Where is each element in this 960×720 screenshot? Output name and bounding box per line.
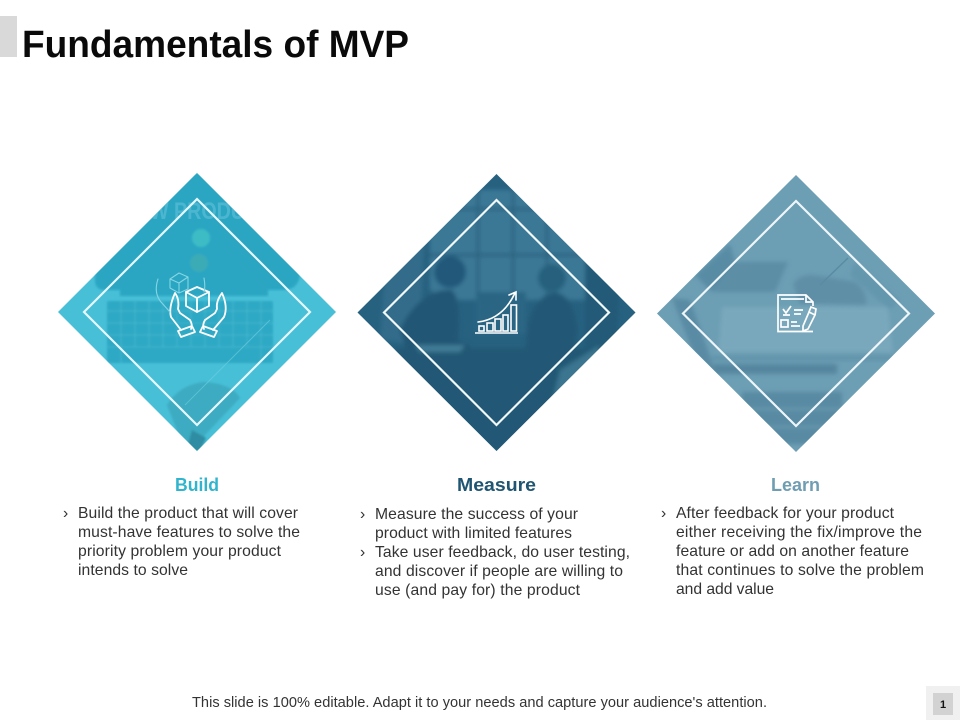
text block: measure: ›	[360, 544, 365, 561]
title accent block	[0, 16, 17, 57]
text block: build: Build the product that will cover	[78, 505, 298, 522]
text block: learn	[661, 505, 924, 598]
text block: build	[63, 505, 300, 579]
icon: checklist with pencil	[778, 295, 816, 332]
inner frame	[683, 201, 909, 426]
panel: measure diamond	[357, 174, 636, 451]
text block: learn: ›	[661, 505, 666, 522]
text block: measure: Take user feedback, do user testing,	[375, 544, 630, 561]
text block: learn: and add value	[676, 581, 774, 598]
text block: learn: After feedback for your product	[676, 505, 895, 522]
heading: measure: Measure	[457, 475, 536, 495]
icon: growth chart	[475, 292, 518, 333]
page number	[926, 686, 960, 720]
text block: measure	[360, 506, 630, 599]
text block: measure: ›	[360, 506, 365, 523]
panel: build diamond	[58, 173, 336, 451]
text block: measure: product with limited features	[375, 525, 572, 542]
heading: learn: Learn	[771, 475, 820, 495]
page number: 1	[940, 699, 946, 711]
text block: build: intends to solve	[78, 562, 188, 579]
text block: measure: Measure the success of your	[375, 506, 578, 523]
heading: build: Build	[175, 475, 219, 495]
text block: learn: that continues to solve the problem	[676, 562, 924, 579]
title: Fundamentals of MVP	[22, 24, 409, 66]
text block: build: priority problem your product	[78, 543, 282, 560]
text block: learn: feature or add on another feature	[676, 543, 909, 560]
text block: build: ›	[63, 505, 68, 522]
text block: measure: use (and pay for) the product	[375, 582, 581, 599]
text block: measure: and discover if people are willing to	[375, 563, 623, 580]
text block: build: must-have features to solve the	[78, 524, 300, 541]
text block: learn: either receiving the fix/improve the	[676, 524, 922, 541]
inner frame	[84, 199, 310, 425]
faint screen heading: W PRODU	[150, 198, 245, 225]
inner frame	[384, 200, 609, 425]
footer note: This slide is 100% editable. Adapt it to your needs and capture your audience's attention.	[192, 695, 767, 711]
panel: learn diamond	[657, 175, 935, 452]
icon: hands holding box	[156, 273, 226, 337]
